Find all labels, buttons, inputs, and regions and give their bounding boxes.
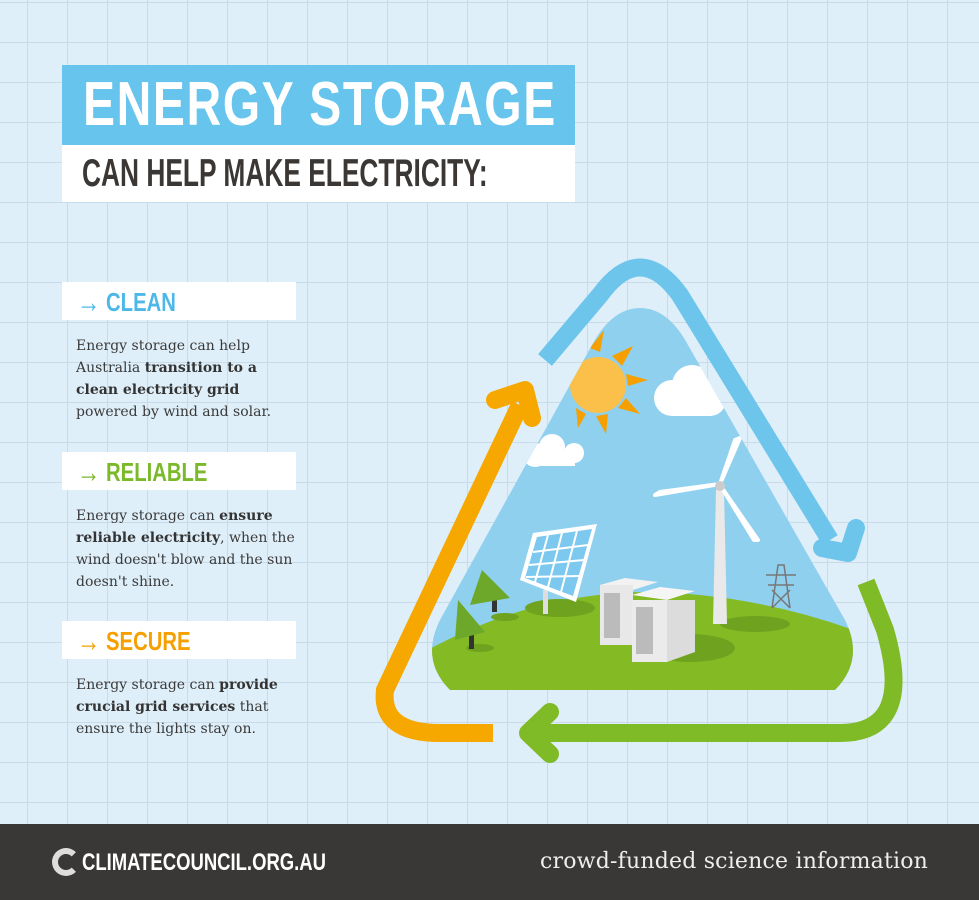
title	[62, 65, 575, 202]
text: clean: Energy storage can help Australia transition to a clean electricity grid powered by wind and solar.	[76, 338, 271, 420]
icon: sun	[570, 330, 648, 434]
icon: cloud right	[654, 365, 726, 416]
arrow: green	[528, 582, 894, 754]
heading: secure: → SECURE	[77, 625, 191, 658]
icon: trees	[455, 570, 510, 649]
icon: battery units	[600, 578, 695, 662]
tagline: crowd-funded science information	[540, 849, 928, 874]
footer	[0, 824, 979, 900]
text: secure: Energy storage can provide crucial grid services that ensure the lights stay on.	[76, 677, 278, 737]
sky triangle	[432, 308, 853, 690]
icon: power pylon	[766, 565, 796, 608]
subtitle: CAN HELP MAKE ELECTRICITY:	[82, 152, 488, 195]
logo: CLIMATECOUNCIL.ORG.AU	[82, 849, 326, 876]
text: reliable: Energy storage can ensure reliable electricity, when the wind doesn't blow and the sun doesn't shine.	[76, 508, 295, 590]
heading: secure	[62, 621, 296, 659]
icon: logo C	[52, 848, 80, 876]
icon: wind turbine	[655, 438, 758, 624]
icon: cloud left	[523, 434, 584, 467]
heading: clean	[62, 282, 296, 320]
heading: reliable	[62, 452, 296, 490]
arrow: orange	[385, 390, 532, 733]
title line 1: ENERGY STORAGE	[83, 70, 557, 139]
heading: clean: → CLEAN	[77, 286, 176, 319]
subtitle	[62, 145, 575, 202]
arrow: blue	[545, 268, 856, 553]
shadows	[466, 599, 790, 662]
illustration	[376, 258, 903, 763]
hill	[432, 592, 853, 690]
icon: solar panel	[520, 524, 597, 614]
heading: reliable: → RELIABLE	[77, 456, 207, 489]
